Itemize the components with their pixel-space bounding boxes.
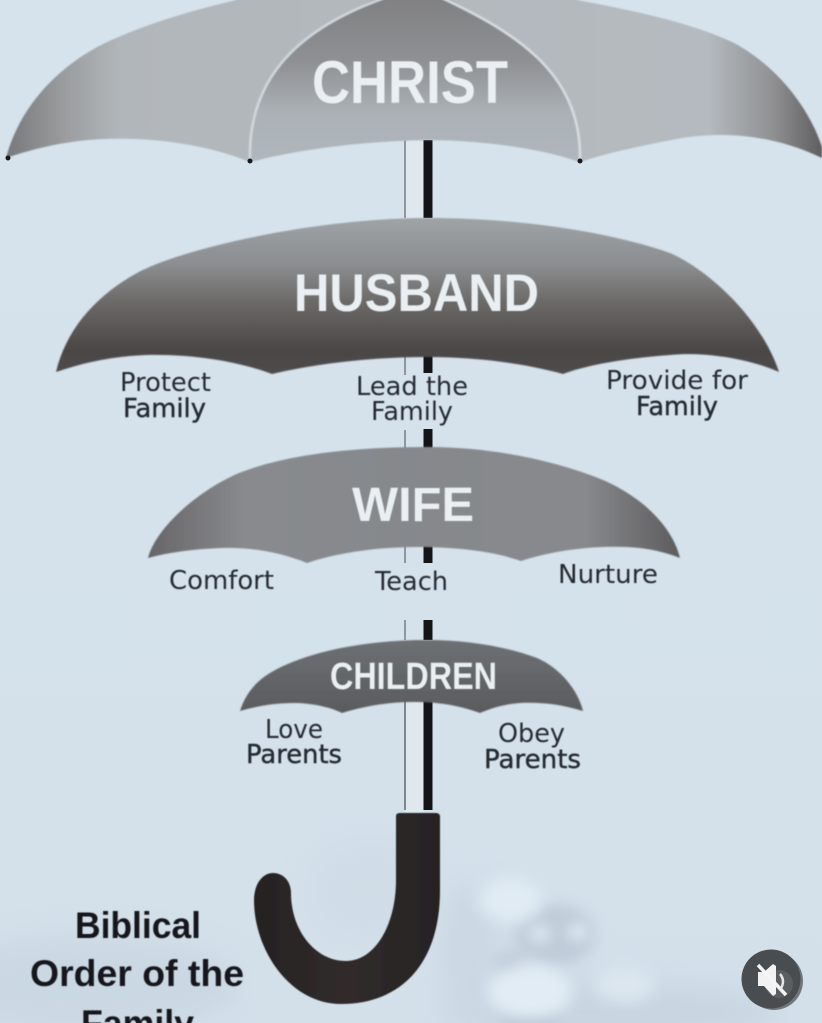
umbrella: Christ xyxy=(6,0,822,164)
canopy tips xyxy=(6,156,10,160)
umbrella: Wife xyxy=(148,447,680,597)
pole: shaft and thin reflection line xyxy=(404,140,432,812)
caption: Biblical Order of the Family xyxy=(30,905,244,1023)
caption: Biblical Order of the Family: Order of the xyxy=(30,953,244,994)
label: Obey Parents: Obey xyxy=(498,719,565,749)
label: Provide for Family: Family xyxy=(636,392,718,422)
label: Love Parents xyxy=(246,715,342,770)
label: Lead the Family xyxy=(356,372,468,427)
panel ribs xyxy=(250,0,390,160)
label: Provide for Family: Provide for xyxy=(606,366,748,396)
label: Lead the Family: Family xyxy=(371,397,453,427)
heading: HUSBAND: HUSBAND xyxy=(294,264,539,323)
background flowers xyxy=(0,840,780,1023)
canopy: Children xyxy=(240,640,583,713)
label: Obey Parents: Parents xyxy=(484,745,581,775)
label: Love Parents: Parents xyxy=(246,740,342,770)
heading: WIFE: WIFE xyxy=(352,479,474,532)
label: Protect Family xyxy=(120,368,211,424)
label: Obey Parents xyxy=(484,719,581,775)
umbrella: Husband xyxy=(56,218,779,427)
canopy: Christ xyxy=(6,0,822,162)
heading: CHRIST: CHRIST xyxy=(312,49,508,116)
centre panel xyxy=(250,0,580,162)
label: Provide for Family xyxy=(606,366,748,422)
label: Protect Family: Protect xyxy=(120,368,211,398)
label: Teach: Teach xyxy=(374,567,448,597)
label: Nurture: Nurture xyxy=(558,560,658,590)
umbrella: Children xyxy=(240,640,583,775)
icon: muted speaker xyxy=(742,950,803,1010)
heading: CHILDREN: CHILDREN xyxy=(330,656,497,698)
label: Lead the Family: Lead the xyxy=(356,372,468,402)
label: Protect Family: Family xyxy=(123,394,206,424)
label: Comfort: Comfort xyxy=(169,566,274,596)
label: Love Parents: Love xyxy=(265,715,323,745)
caption: Biblical Order of the Family: Biblical xyxy=(75,905,201,946)
canopy: Wife xyxy=(148,447,680,563)
umbrella handle xyxy=(254,813,440,1004)
canopy: Husband xyxy=(56,218,779,374)
